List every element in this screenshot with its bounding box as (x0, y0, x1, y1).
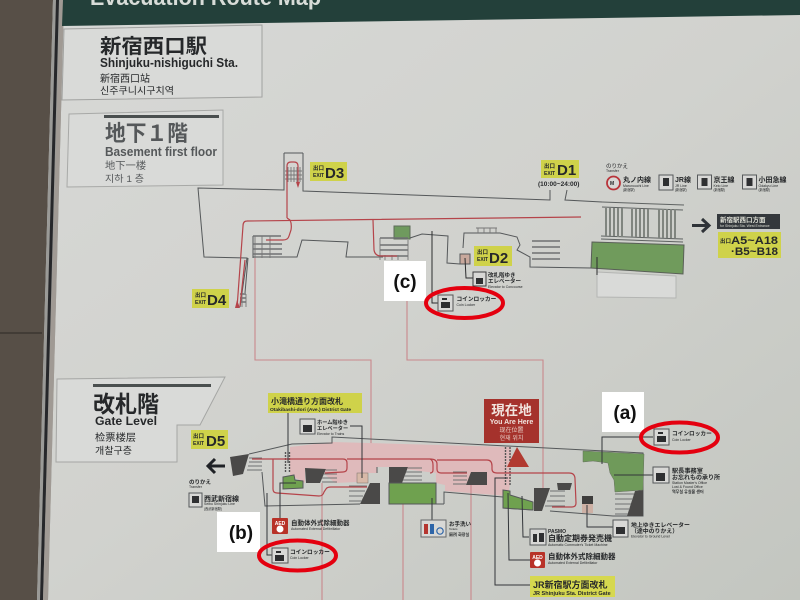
callout: you are here: 现在位置 (499, 426, 524, 434)
label: Shinjuku West Entrance exits (717, 214, 781, 258)
exit label D5 (191, 430, 228, 450)
coin locker (c) with red ellipse: コインロッカー (456, 296, 497, 303)
Seibu Shinjuku line transfer (189, 479, 239, 511)
label: Otakibashi-dori gate: 小滝橋通り方面改札 (271, 396, 343, 406)
panel: station name: 新宿西口駅 (100, 35, 207, 58)
label: Otakibashi-dori gate: Otakibashi-dori (Ave.) District Gate (270, 407, 351, 413)
exit label D2: EXIT (477, 257, 488, 263)
white label (b) (217, 512, 260, 552)
stair lines (247, 458, 634, 514)
icon label: PASMO ticket machine: PASMO (548, 529, 566, 535)
icon label: elevator to ground level: （途中のりかえ） (631, 527, 678, 535)
exit label D4 (192, 289, 229, 309)
stairs (240, 236, 560, 302)
Seibu Shinjuku line transfer: Seibu Shinjuku Line (204, 502, 235, 506)
exit label D2: 出口 (477, 248, 488, 256)
icon label: AED right: Automated External Defibrillator (548, 561, 598, 565)
coin locker (b) with red ellipse (259, 540, 336, 570)
icon label: AED right: 自動体外式除細動器 (548, 551, 616, 561)
label: Shinjuku West Entrance exits: 新宿駅西口方面 (720, 215, 766, 224)
icon label: AED left (272, 518, 350, 534)
exit label D1 (538, 160, 579, 188)
transfer lines legend: (新宿駅) (714, 187, 725, 192)
panel: basement first floor heading: Basement first floor (105, 145, 217, 159)
label: Otakibashi-dori gate (268, 393, 362, 413)
exit label D2: D2 (489, 250, 508, 267)
panel: basement first floor heading: 地下一楼 (105, 159, 146, 172)
transfer lines legend (606, 163, 786, 192)
dark blocks (230, 454, 249, 476)
coin locker (b) with red ellipse: Coin Locker (290, 556, 310, 560)
panel: basement first floor heading: 지하 1 층 (105, 173, 144, 185)
transfer lines legend: 京王線 (714, 175, 734, 184)
panel: basement first floor heading (67, 110, 223, 187)
label: Shinjuku West Entrance exits: 出口 (720, 237, 731, 245)
Seibu Shinjuku line transfer: Transfer (189, 485, 203, 489)
exit label D4: D4 (207, 292, 227, 309)
green areas (283, 475, 303, 489)
panel: station name (62, 25, 262, 100)
exit label D1: (10:00~24:00) (538, 181, 579, 188)
exit label D1: D1 (557, 162, 576, 179)
callout: you are here (484, 399, 539, 443)
icon label: elevator to concourse (473, 271, 523, 289)
exit label D4: EXIT (195, 300, 206, 306)
panel: gate level heading (56, 377, 225, 462)
panel: gate level heading: 检票楼层 (95, 431, 136, 444)
large stairs (601, 202, 684, 242)
icon label: station master's office: 駅長事務室 (672, 467, 703, 475)
coin locker (a) with red ellipse: Coin Locker (672, 438, 692, 442)
white label (a): (a) (613, 403, 637, 424)
exit label D5: 出口 (193, 432, 204, 440)
transfer lines legend: Marunouchi Line (623, 184, 649, 188)
exit label D1: EXIT (544, 171, 555, 177)
icon label: AED left: 自動体外式除細動器 (291, 518, 350, 527)
icon label: PASMO ticket machine: 自動定期券発売機 (548, 533, 612, 543)
icon label: elevator to ground level: 地上ゆきエレベーター (631, 521, 690, 529)
panel: station name: Shinjuku-nishiguchi Sta. (100, 56, 238, 70)
icon label: elevator to concourse: 改札階ゆき (488, 271, 516, 279)
coin locker (c) with red ellipse (426, 288, 503, 318)
exit label D3: EXIT (313, 173, 324, 179)
panel: gate level heading: 改札階 (93, 391, 159, 417)
top title band (62, 0, 800, 26)
transfer lines legend: Transfer (606, 169, 620, 173)
transfer lines legend: Keio Line (714, 184, 728, 188)
transfer lines legend: M (610, 181, 614, 187)
green areas and hollow box (394, 226, 410, 239)
exit label D2 (474, 246, 512, 267)
icon label: station master's office: 역무실 유실물 센터 (672, 488, 704, 494)
label: Shinjuku West Entrance exits: A5~A18 (731, 235, 778, 247)
icon label: station master's office: Station Master's Office (672, 481, 707, 485)
icon label: elevator to trains: ホーム階ゆき (317, 418, 348, 426)
exit label D3: 出口 (313, 164, 324, 172)
Seibu Shinjuku line transfer: 西武新宿線 (204, 494, 239, 503)
coin locker (b) with red ellipse: コインロッカー (290, 549, 330, 556)
exit label D5: D5 (206, 433, 225, 450)
exit label D4: 出口 (195, 291, 206, 299)
icon: current position triangle (507, 447, 529, 467)
walls (198, 153, 602, 307)
icon label: elevator to ground level (613, 520, 690, 538)
icon label: toilets (421, 520, 472, 537)
callout: you are here: You Are Here (490, 419, 533, 426)
label: JR Shinjuku gate: JR Shinjuku Sta. District Gate (533, 591, 611, 597)
icon label: toilets: お手洗い (449, 520, 472, 528)
pale evacuation connectors (255, 258, 543, 488)
basement floor plan (198, 153, 684, 488)
icon label: AED right (530, 551, 616, 568)
panel: basement first floor heading: 地下１階 (105, 121, 188, 146)
icon label: station master's office (653, 467, 720, 494)
walls (249, 437, 643, 516)
gate level floor plan (230, 412, 653, 600)
label: Shinjuku West Entrance exits: ·B5~B18 (731, 246, 778, 258)
arrow: to Seibu Shinjuku (208, 459, 225, 473)
icon label: AED right: AED (532, 555, 543, 561)
label: Shinjuku West Entrance exits: for Shinjuku Sta. West Entrance (720, 224, 770, 228)
icon label: station master's office: Lost & Found Office (672, 485, 703, 489)
exit label D3: D3 (325, 165, 344, 182)
callout: you are here: 현재 위치 (500, 434, 523, 442)
icon label: elevator to trains: エレベーター (317, 424, 348, 432)
red routes (252, 459, 576, 507)
pale evacuation connectors (322, 483, 471, 600)
icon label: elevator to ground level: Elevator to Ground Level (631, 534, 670, 538)
Seibu Shinjuku line transfer: のりかえ (189, 479, 212, 486)
transfer lines legend: 小田急線 (758, 175, 786, 184)
exit label D1: 出口 (544, 162, 555, 170)
evacuation routes (237, 162, 581, 308)
icon label: elevator to concourse: Elevator to Concourse (488, 285, 523, 289)
white label (c): (c) (393, 272, 417, 293)
transfer lines legend: JR線 (675, 175, 691, 184)
callout: you are here: 現在地 (491, 402, 532, 418)
white label (c) (384, 261, 426, 301)
transfer lines legend: のりかえ (606, 163, 628, 170)
panel: gate level heading: 개찰구층 (95, 446, 132, 457)
transfer lines legend: JR Line (675, 184, 687, 188)
exit label D5: EXIT (193, 441, 204, 447)
pink concourse (290, 442, 511, 496)
exit label D3 (310, 162, 347, 182)
icon label: elevator to concourse: エレベーター (488, 277, 521, 285)
panel: station name: 신주쿠니시구치역 (100, 85, 174, 97)
leader lines (267, 412, 653, 585)
transfer lines legend: 丸ノ内線 (623, 175, 651, 184)
label: JR Shinjuku gate (530, 576, 615, 597)
white label (b): (b) (229, 523, 253, 544)
panel: station name: 新宿西口站 (100, 72, 150, 85)
icon label: PASMO ticket machine (530, 529, 612, 547)
icon label: elevator to trains (300, 418, 348, 436)
coin locker (a) with red ellipse (641, 422, 718, 452)
label: JR Shinjuku gate: JR新宿駅方面改札 (533, 579, 608, 590)
arrow: towards Shinjuku West (692, 219, 709, 232)
icon label: toilets: Toilets (449, 527, 458, 531)
white label (a) (602, 392, 644, 432)
icon label: PASMO ticket machine: Automatic Commuter's Ticket Machine (548, 543, 608, 547)
coin locker (a) with red ellipse: コインロッカー (672, 430, 712, 438)
transfer lines legend: (新宿駅) (623, 187, 635, 192)
icon label: elevator to trains: Elevator to Trains (317, 432, 344, 436)
transfer lines legend: (新宿駅) (758, 187, 770, 192)
transfer lines legend: Odakyu Line (758, 184, 778, 188)
icon label: station master's office: お忘れもの承り所 (672, 474, 720, 482)
transfer lines legend: (新宿駅) (675, 187, 687, 192)
coin locker (c) with red ellipse: Coin Locker (456, 303, 476, 307)
icon label: toilets: 厕所 화장실 (449, 531, 469, 537)
Seibu Shinjuku line transfer: (西武新宿駅) (204, 506, 222, 511)
icon label: AED left: AED (275, 521, 286, 527)
leader lines (432, 231, 597, 303)
panel: gate level heading: Gate Level (95, 414, 157, 428)
icon label: AED left: Automated External Defibrillator (291, 527, 341, 531)
